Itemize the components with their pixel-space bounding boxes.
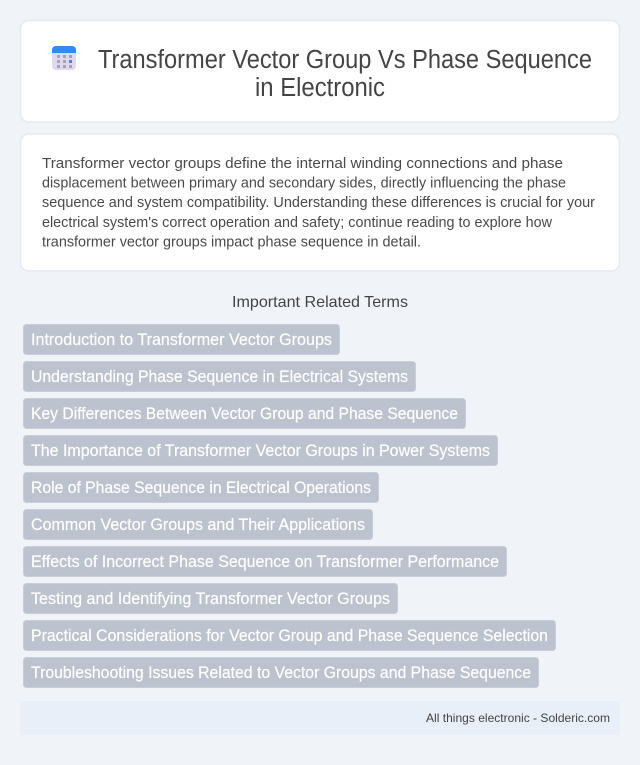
tag 1: Introduction to Transformer Vector Groups xyxy=(31,331,332,349)
tag 8: Testing and Identifying Transformer Vector Groups xyxy=(31,590,390,608)
tag 10: Troubleshooting Issues Related to Vector Groups and Phase Sequence xyxy=(31,664,531,682)
text block: intro paragraph: displacement between primary and secondary sides, directly influencing the phase xyxy=(42,176,566,192)
tag 8 xyxy=(24,584,398,614)
icon: calendar grid xyxy=(52,46,76,70)
tag 9 xyxy=(24,620,556,650)
tag 2: Understanding Phase Sequence in Electrical Systems xyxy=(31,368,408,386)
tag 3: Key Differences Between Vector Group and Phase Sequence xyxy=(31,405,458,423)
tag 6 xyxy=(24,510,372,540)
tag 2 xyxy=(24,362,416,392)
tag 5: Role of Phase Sequence in Electrical Operations xyxy=(31,479,371,497)
tag 9: Practical Considerations for Vector Group and Phase Sequence Selection xyxy=(31,627,548,645)
heading: important related terms: Important Related Terms xyxy=(232,294,408,311)
title xyxy=(98,46,592,102)
text block: intro paragraph: Transformer vector groups define the internal winding connections and phase xyxy=(42,156,563,172)
tag 4: The Importance of Transformer Vector Groups in Power Systems xyxy=(31,442,490,460)
tag 5 xyxy=(24,472,378,502)
tag 7: Effects of Incorrect Phase Sequence on Transformer Performance xyxy=(31,553,499,571)
tag 6: Common Vector Groups and Their Applications xyxy=(31,516,365,534)
tag 10 xyxy=(24,658,538,688)
panel: intro paragraph card xyxy=(20,134,620,271)
panel: title card xyxy=(20,20,620,122)
text block: intro paragraph xyxy=(42,156,595,250)
footer xyxy=(20,701,620,735)
tag 1 xyxy=(24,324,340,354)
footer: All things electronic - Solderic.com xyxy=(426,711,610,725)
text block: intro paragraph: transformer vector groups impact phase sequence in detail. xyxy=(42,234,421,250)
title: Transformer Vector Group Vs Phase Sequence xyxy=(98,46,592,74)
tag 7 xyxy=(24,546,506,576)
tag 4 xyxy=(24,436,498,466)
tag 3 xyxy=(24,398,466,428)
text block: intro paragraph: sequence and system compatibility. Understanding these differences is crucial for your xyxy=(42,195,595,211)
list: related term tags xyxy=(24,324,556,688)
title: in Electronic xyxy=(255,74,385,102)
text block: intro paragraph: electrical system's correct operation and safety; continue reading to explore how xyxy=(42,215,553,231)
